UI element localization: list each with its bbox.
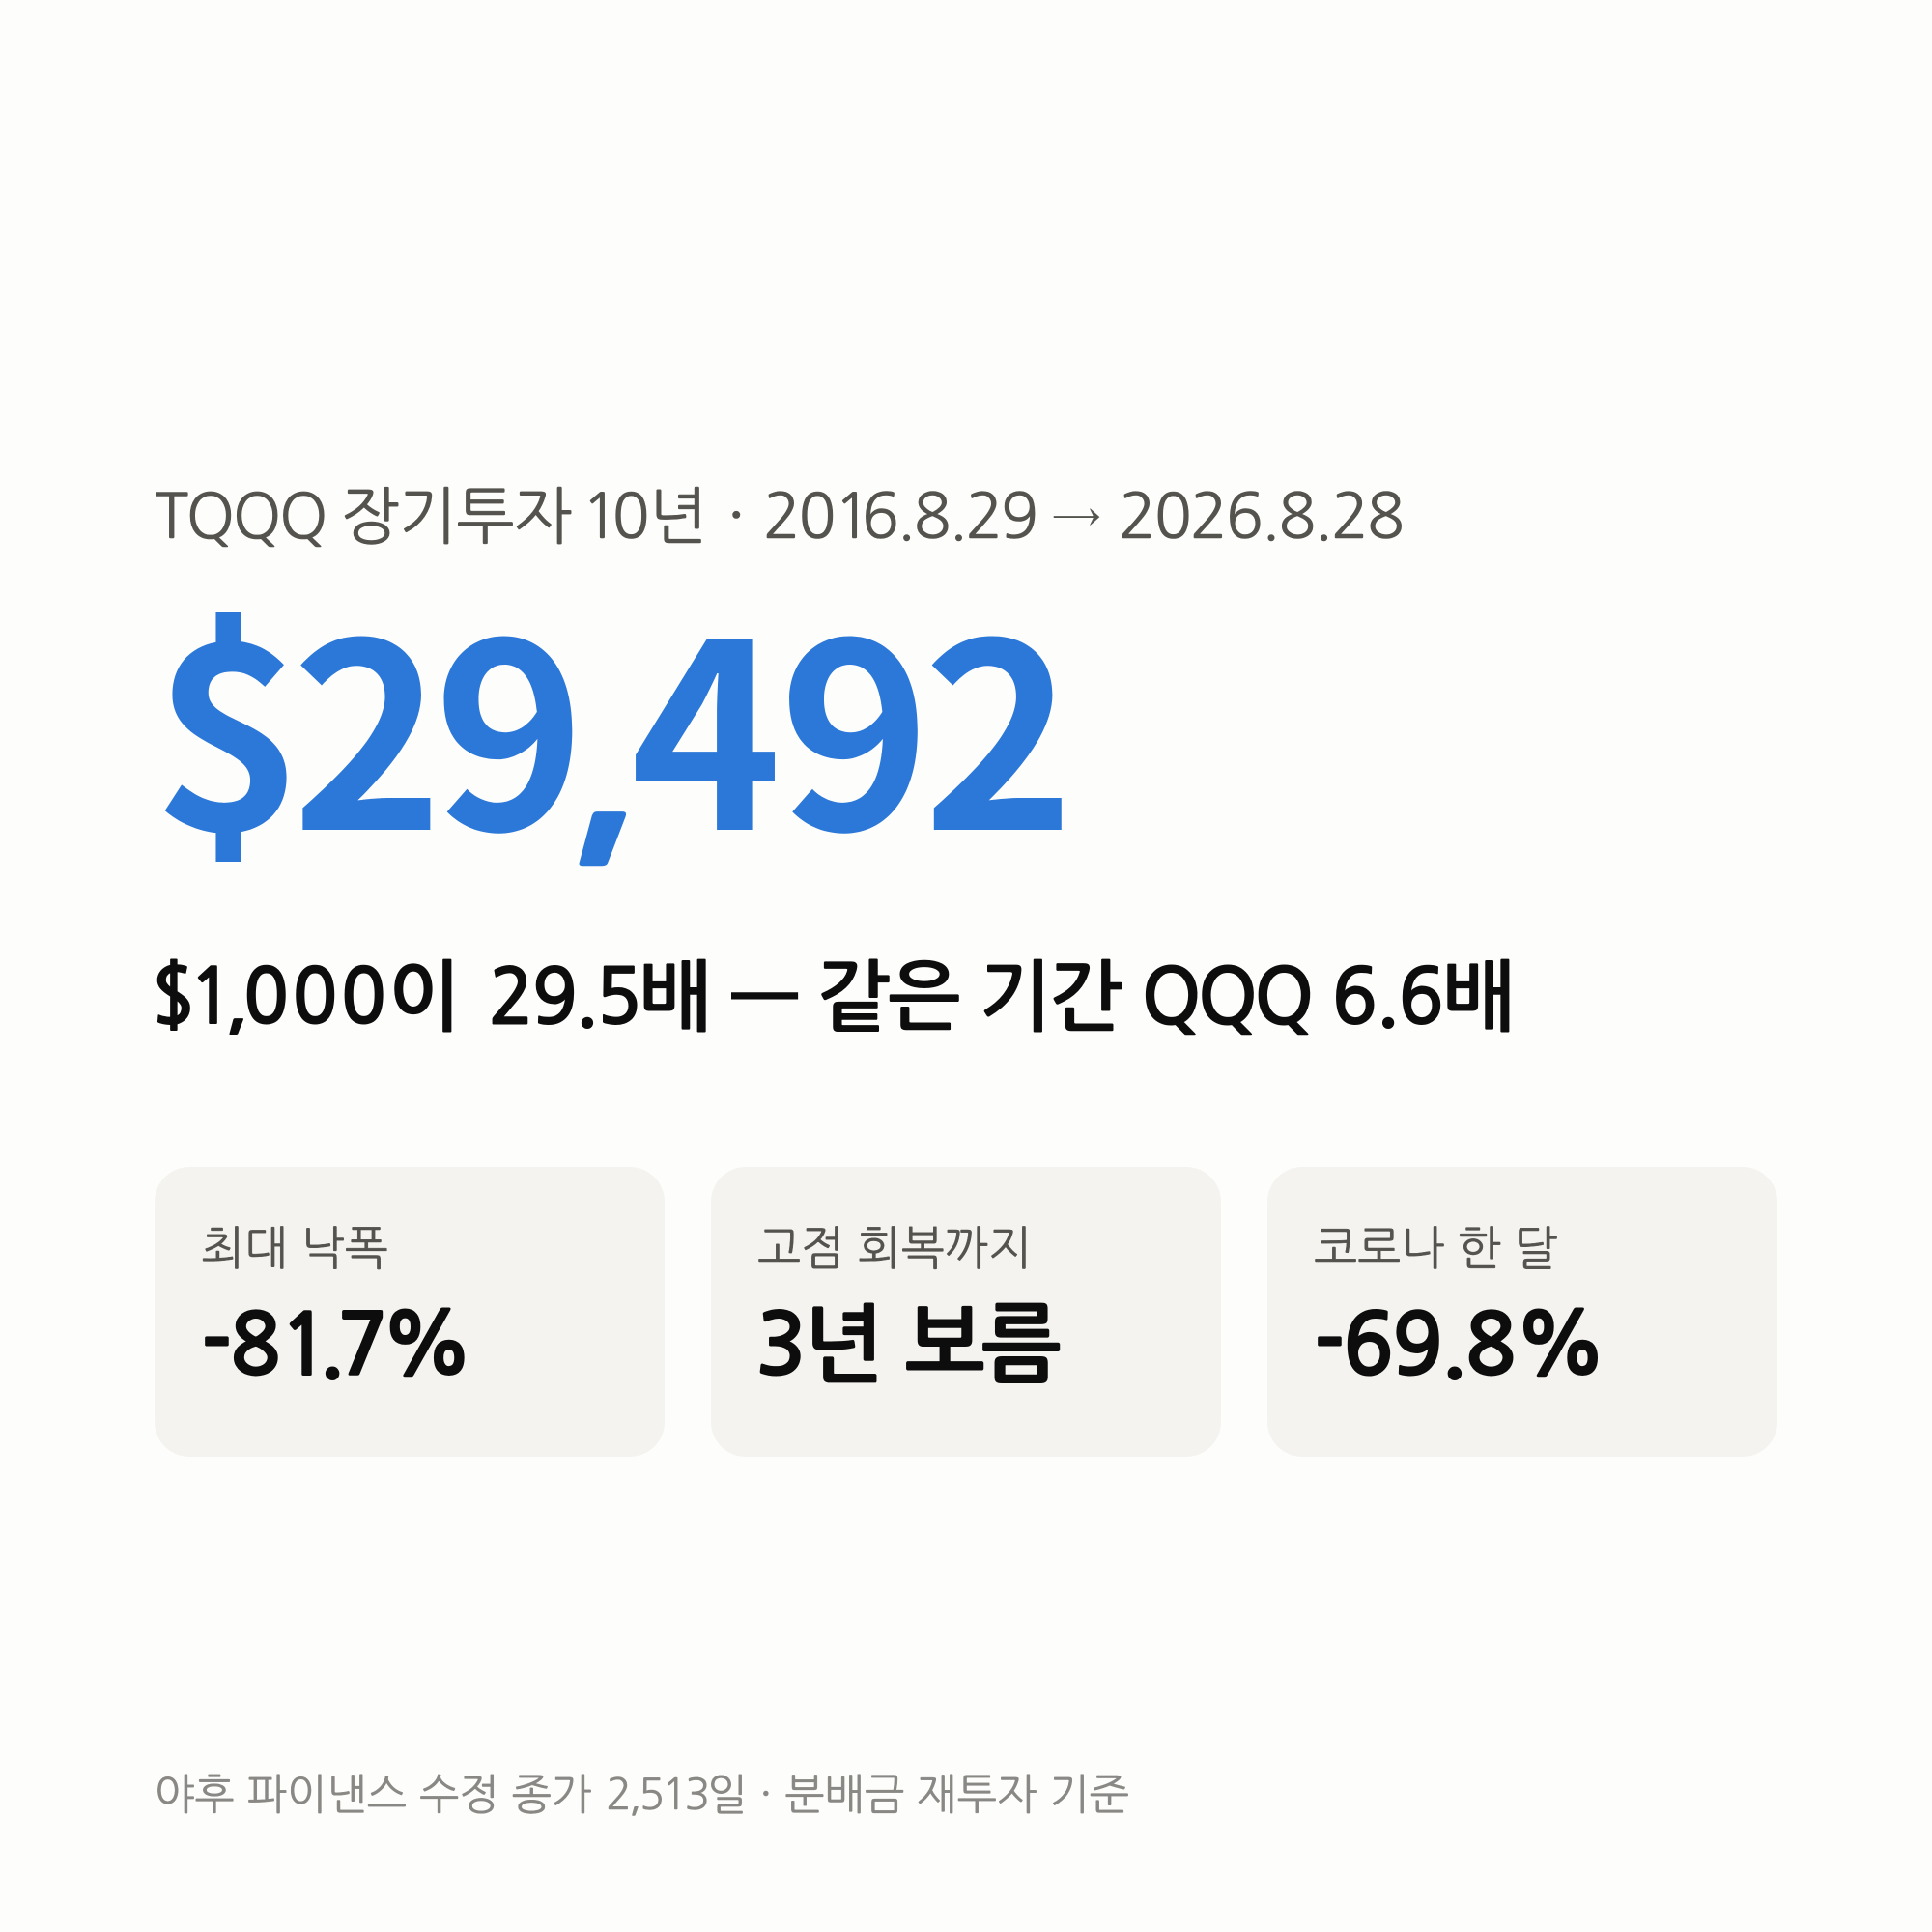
panel: covid month <box>1267 1167 1777 1457</box>
value: recovery time: 3년 보름 <box>755 1304 1058 1388</box>
label: max drawdown: 최대 낙폭 <box>201 1225 388 1271</box>
comparison statement: 29.5배 <box>488 959 708 1036</box>
panel: max drawdown <box>155 1167 665 1457</box>
subtitle: period: 2016.8.29 <box>763 486 1037 548</box>
value: max drawdown: -81.7% <box>201 1304 471 1388</box>
panel: recovery time <box>711 1167 1221 1457</box>
subtitle: period: TQQQ <box>155 486 326 548</box>
subtitle: period: 장기투자 <box>341 486 572 548</box>
footnote: 야후 파이낸스 수정 종가 2,513일 · 분배금 재투자 기준 <box>155 1774 1129 1816</box>
subtitle: period: 2026.8.28 <box>1119 486 1403 548</box>
comparison statement <box>150 958 1513 1036</box>
comparison statement: — <box>731 959 798 1036</box>
comparison statement: 기간 <box>979 959 1121 1036</box>
headline value: $29,492 <box>153 531 1063 904</box>
comparison statement: 6.6배 <box>1331 959 1513 1036</box>
subtitle: period: → <box>1053 492 1100 542</box>
subtitle: period: 10년 <box>582 486 707 548</box>
label: covid month: 코로나 한 달 <box>1314 1225 1557 1271</box>
subtitle: period <box>155 486 1403 548</box>
comparison statement: $1,000이 <box>150 959 459 1036</box>
comparison statement: QQQ <box>1141 959 1310 1036</box>
label: recovery time: 고점 회복까지 <box>757 1225 1032 1271</box>
subtitle: period: · <box>727 486 746 548</box>
value: covid month: -69.8% <box>1314 1304 1605 1388</box>
comparison statement: 같은 <box>817 959 958 1036</box>
